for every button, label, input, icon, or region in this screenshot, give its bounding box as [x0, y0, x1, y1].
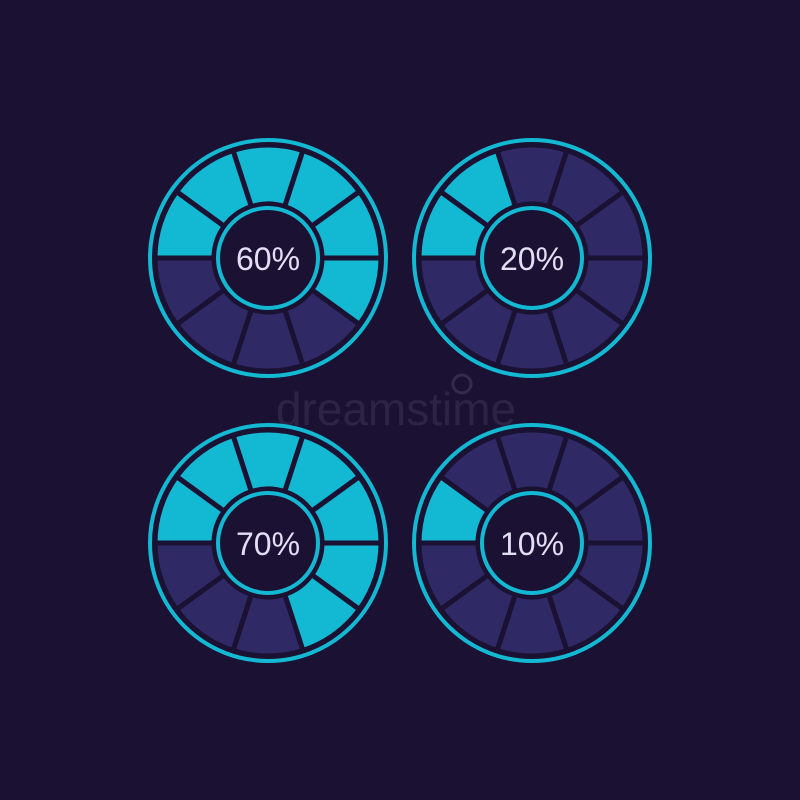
chart: 10%: [414, 425, 650, 661]
chart: 70%: [150, 425, 386, 661]
label: 10%: 10%: [500, 526, 564, 562]
watermark: dreamstime: [276, 383, 516, 435]
chart: 60%: [150, 140, 386, 376]
label: 60%: 60%: [236, 241, 300, 277]
label: 70%: 70%: [236, 526, 300, 562]
label: 20%: 20%: [500, 241, 564, 277]
chart: 20%: [414, 140, 650, 376]
